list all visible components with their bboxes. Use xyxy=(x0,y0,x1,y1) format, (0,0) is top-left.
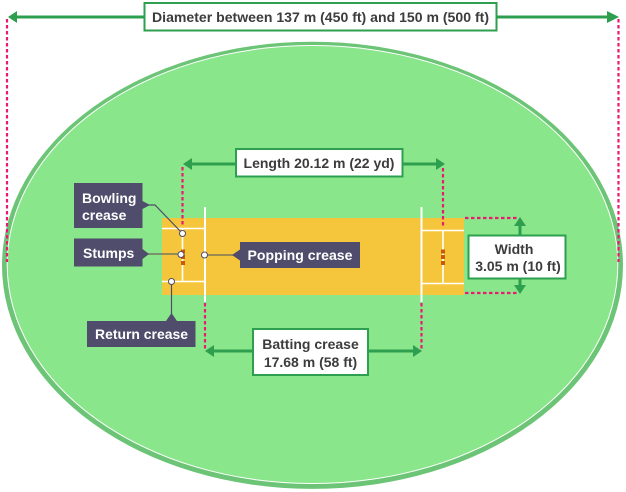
callout: return crease xyxy=(87,278,196,347)
callout: stumps xyxy=(74,238,184,266)
pitch xyxy=(162,218,464,295)
batting crease dimension xyxy=(205,329,422,375)
batting crease label: 17.68 m (58 ft) xyxy=(264,354,357,370)
batting crease label xyxy=(253,329,368,375)
left crease lines xyxy=(162,207,205,302)
length dimension xyxy=(183,149,445,176)
callout: bowling crease: crease xyxy=(82,207,127,223)
callout: bowling crease: Bowling xyxy=(82,190,136,206)
length arrow xyxy=(183,158,445,170)
callout: popping crease: Popping crease xyxy=(248,247,353,263)
width label: Width xyxy=(495,241,533,257)
right crease lines xyxy=(422,207,464,302)
callout: bowling crease xyxy=(74,183,186,236)
callout: popping crease xyxy=(202,242,360,268)
batting crease label: Batting crease xyxy=(262,336,359,352)
left stumps xyxy=(181,250,185,265)
right stumps xyxy=(441,250,445,265)
width label xyxy=(468,236,566,278)
callout: stumps: Stumps xyxy=(83,245,135,261)
diameter label xyxy=(144,3,496,30)
length label: Length 20.12 m (22 yd) xyxy=(244,155,394,171)
width dimension xyxy=(468,217,566,294)
batting crease arrow xyxy=(205,345,422,357)
diameter arrow xyxy=(8,11,619,23)
dotted guide lines xyxy=(7,19,618,351)
length label xyxy=(236,149,402,176)
width label: 3.05 m (10 ft) xyxy=(475,258,561,274)
diameter label: Diameter between 137 m (450 ft) and 150 m (500 ft) xyxy=(152,9,489,25)
width arrows xyxy=(514,217,526,294)
diameter dimension xyxy=(8,3,619,30)
callout: return crease: Return crease xyxy=(95,326,188,342)
